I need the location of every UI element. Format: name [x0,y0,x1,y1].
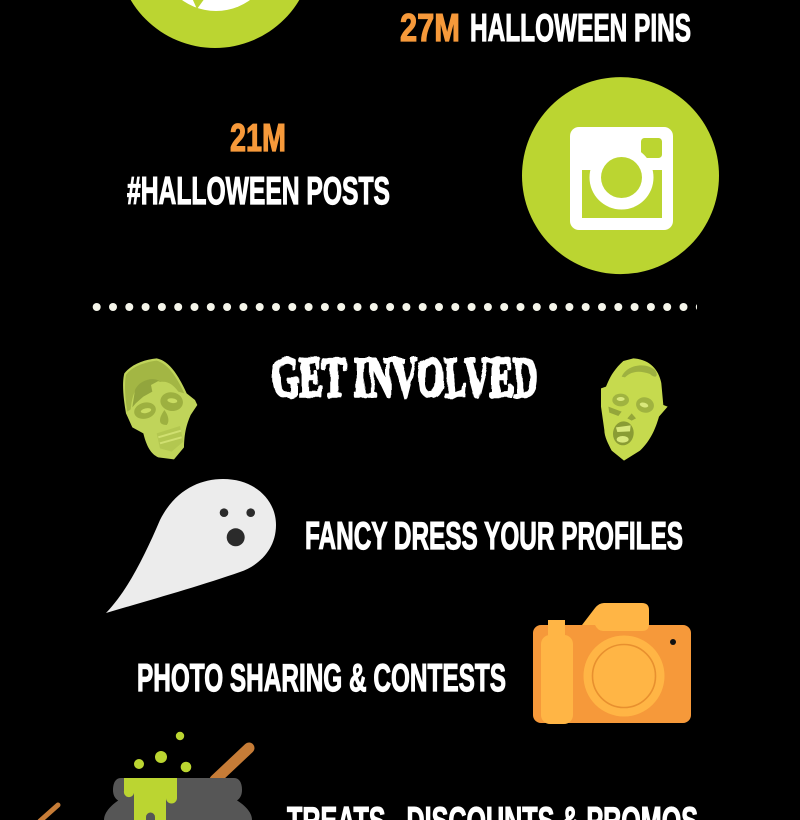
stat: 21M Halloween posts: 21M [230,117,286,160]
heading: Get Involved: GET INVOLVED [272,347,538,409]
stat: 27M Halloween pins [400,7,691,50]
stat: 21M Halloween posts: #HALLOWEEN POSTS [127,170,390,213]
icon: right zombie head [601,358,668,461]
icon: Pinterest circle [117,0,313,48]
icon: camera [533,603,691,724]
stat: 27M Halloween pins: 27M [400,7,460,50]
icon: Instagram circle [522,77,719,274]
icon: cauldron [40,732,252,820]
icon: left zombie head [123,358,197,459]
dotted divider [93,303,704,311]
text: photo sharing and contests: PHOTO SHARING & CONTESTS [137,657,506,700]
icon: ghost [106,479,276,613]
stat: 21M Halloween posts [127,117,390,213]
